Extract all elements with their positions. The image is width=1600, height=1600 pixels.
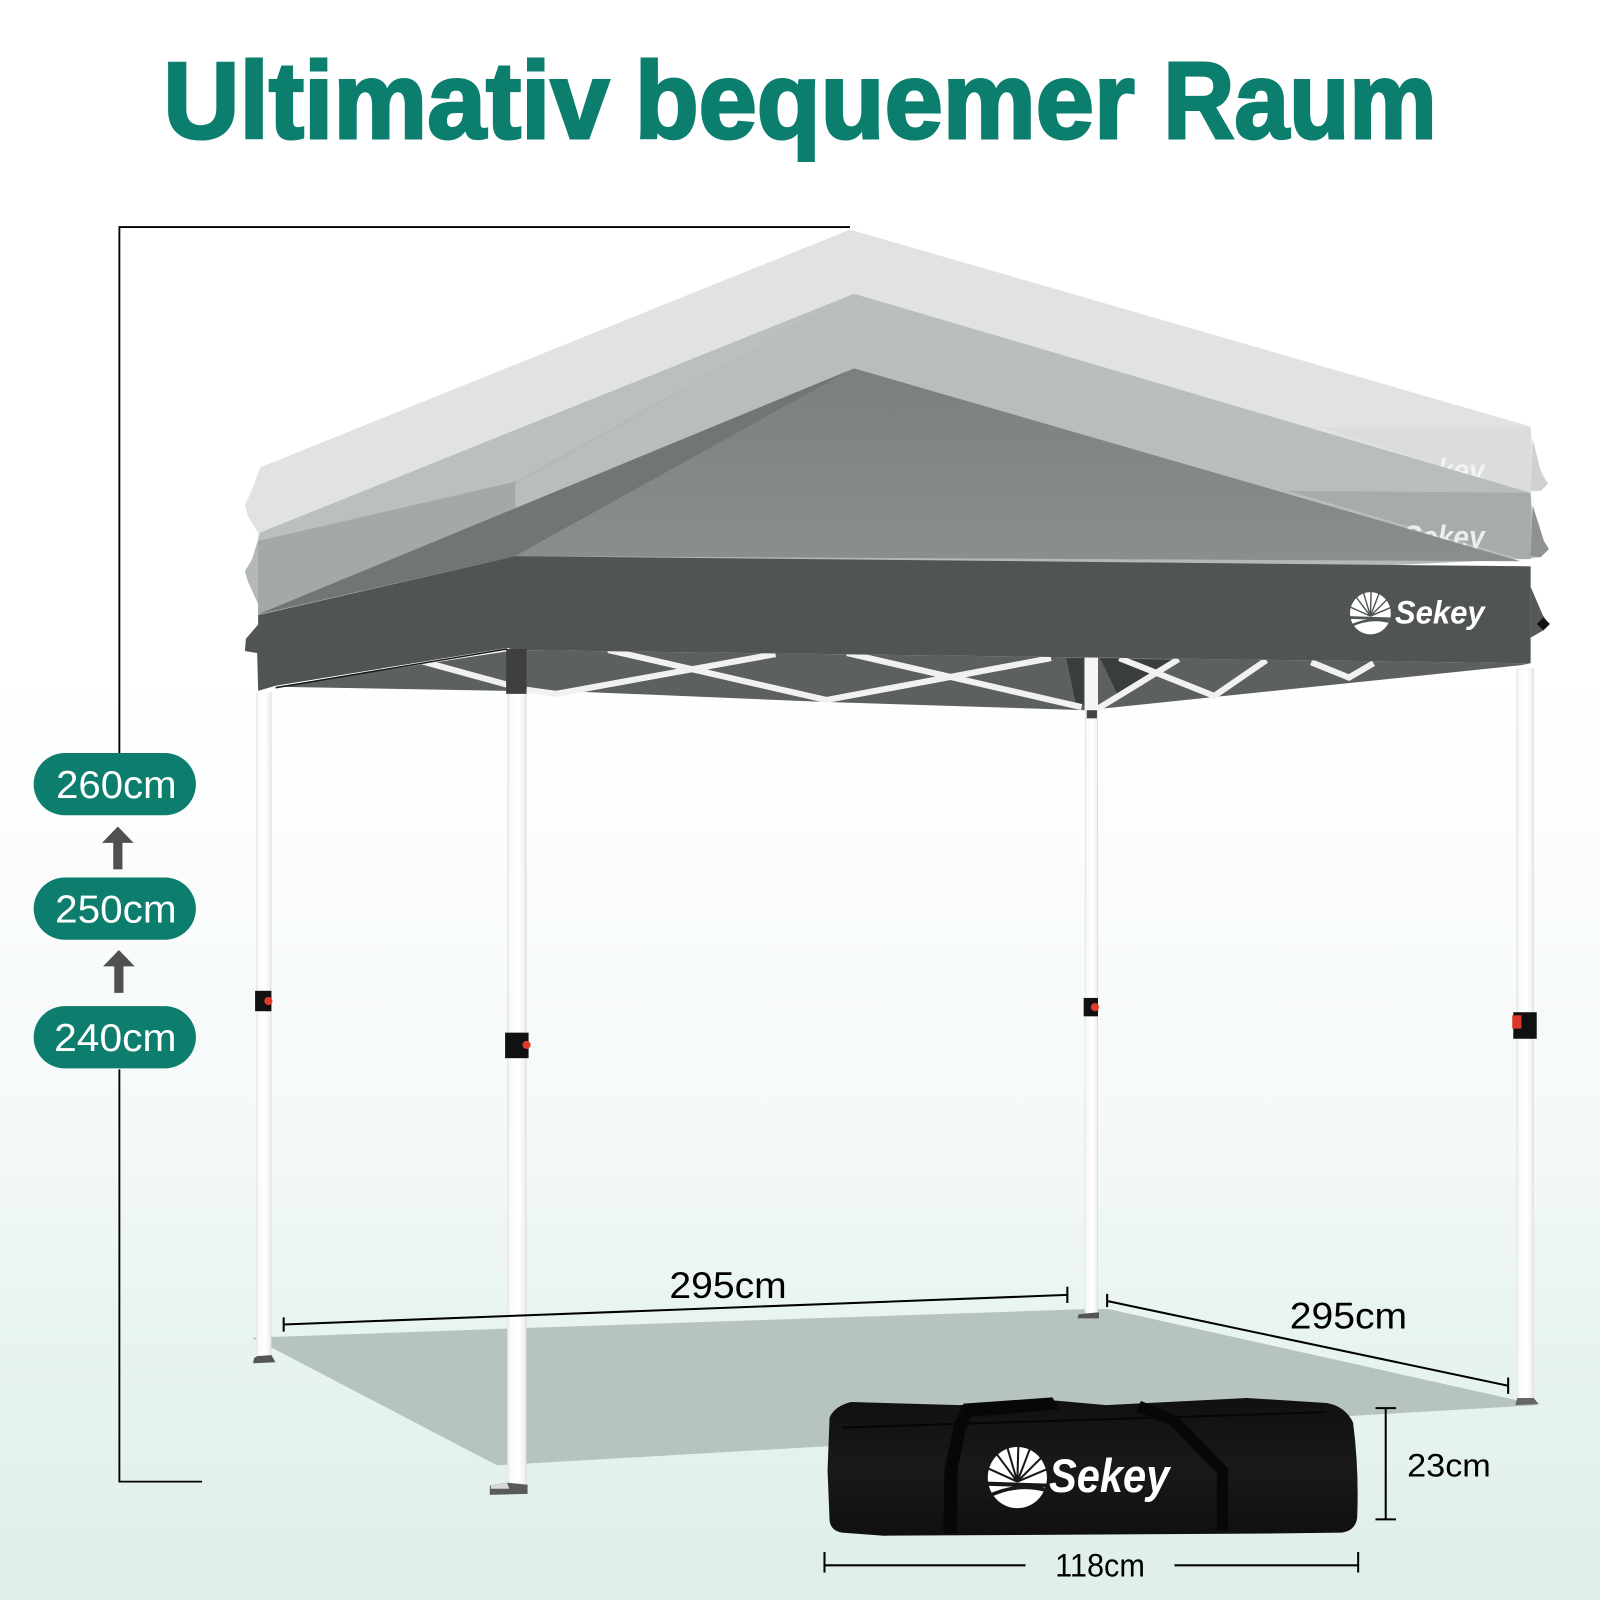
back pole <box>1078 657 1099 1318</box>
dimension label: bag height: 23cm <box>1407 1447 1491 1484</box>
dimension: front width line <box>284 1287 1067 1332</box>
title: bequemer <box>635 40 1135 161</box>
dimension: bag height <box>1376 1408 1396 1519</box>
arrow: 250 to 260 <box>102 827 134 869</box>
title: Ultimativ <box>163 40 609 161</box>
canopy: middle position 250cm <box>245 294 1548 617</box>
carry bag <box>828 1398 1358 1536</box>
canopy logo <box>1349 591 1486 634</box>
pole: right corner <box>1512 668 1539 1405</box>
canopy: highest position 260cm <box>245 230 1548 541</box>
canopy: lowest position 240cm <box>245 368 1550 691</box>
dimension: bag length <box>824 1552 1358 1572</box>
canopy logo: Sekey <box>1395 593 1486 630</box>
canopy: highest position 260cm: Sekey <box>1403 452 1486 489</box>
title <box>163 40 1437 161</box>
dimension label: front width: 295cm <box>669 1265 787 1306</box>
bag strap right <box>1139 1406 1222 1531</box>
height bracket line <box>119 227 850 1482</box>
height pill: 240cm <box>34 1006 196 1068</box>
height pill: 250cm <box>34 878 196 940</box>
dimension label: bag length: 118cm <box>1055 1547 1145 1584</box>
canopy underside <box>276 650 1531 710</box>
height pill: 240cm: 240cm <box>54 1017 177 1060</box>
pole: front centre corner <box>490 649 531 1495</box>
dimension label: side depth: 295cm <box>1290 1296 1407 1337</box>
pole: front left corner <box>253 692 276 1363</box>
canopy: middle position 250cm: Sekey <box>1403 518 1486 555</box>
bag logo: Sekey <box>1049 1450 1172 1502</box>
height pill: 260cm <box>34 753 196 815</box>
frame trusses <box>421 650 1373 709</box>
dimension: side depth line <box>1107 1294 1508 1394</box>
arrow: 240 to 250 <box>103 950 135 993</box>
bag logo <box>986 1445 1172 1508</box>
dark inner frame shadows <box>1066 658 1173 706</box>
title: Raum <box>1163 40 1437 161</box>
floor shadow <box>252 1309 1539 1465</box>
bag strap left <box>946 1400 1055 1531</box>
height pill: 260cm: 260cm <box>56 764 177 807</box>
height pill: 250cm: 250cm <box>55 888 177 931</box>
